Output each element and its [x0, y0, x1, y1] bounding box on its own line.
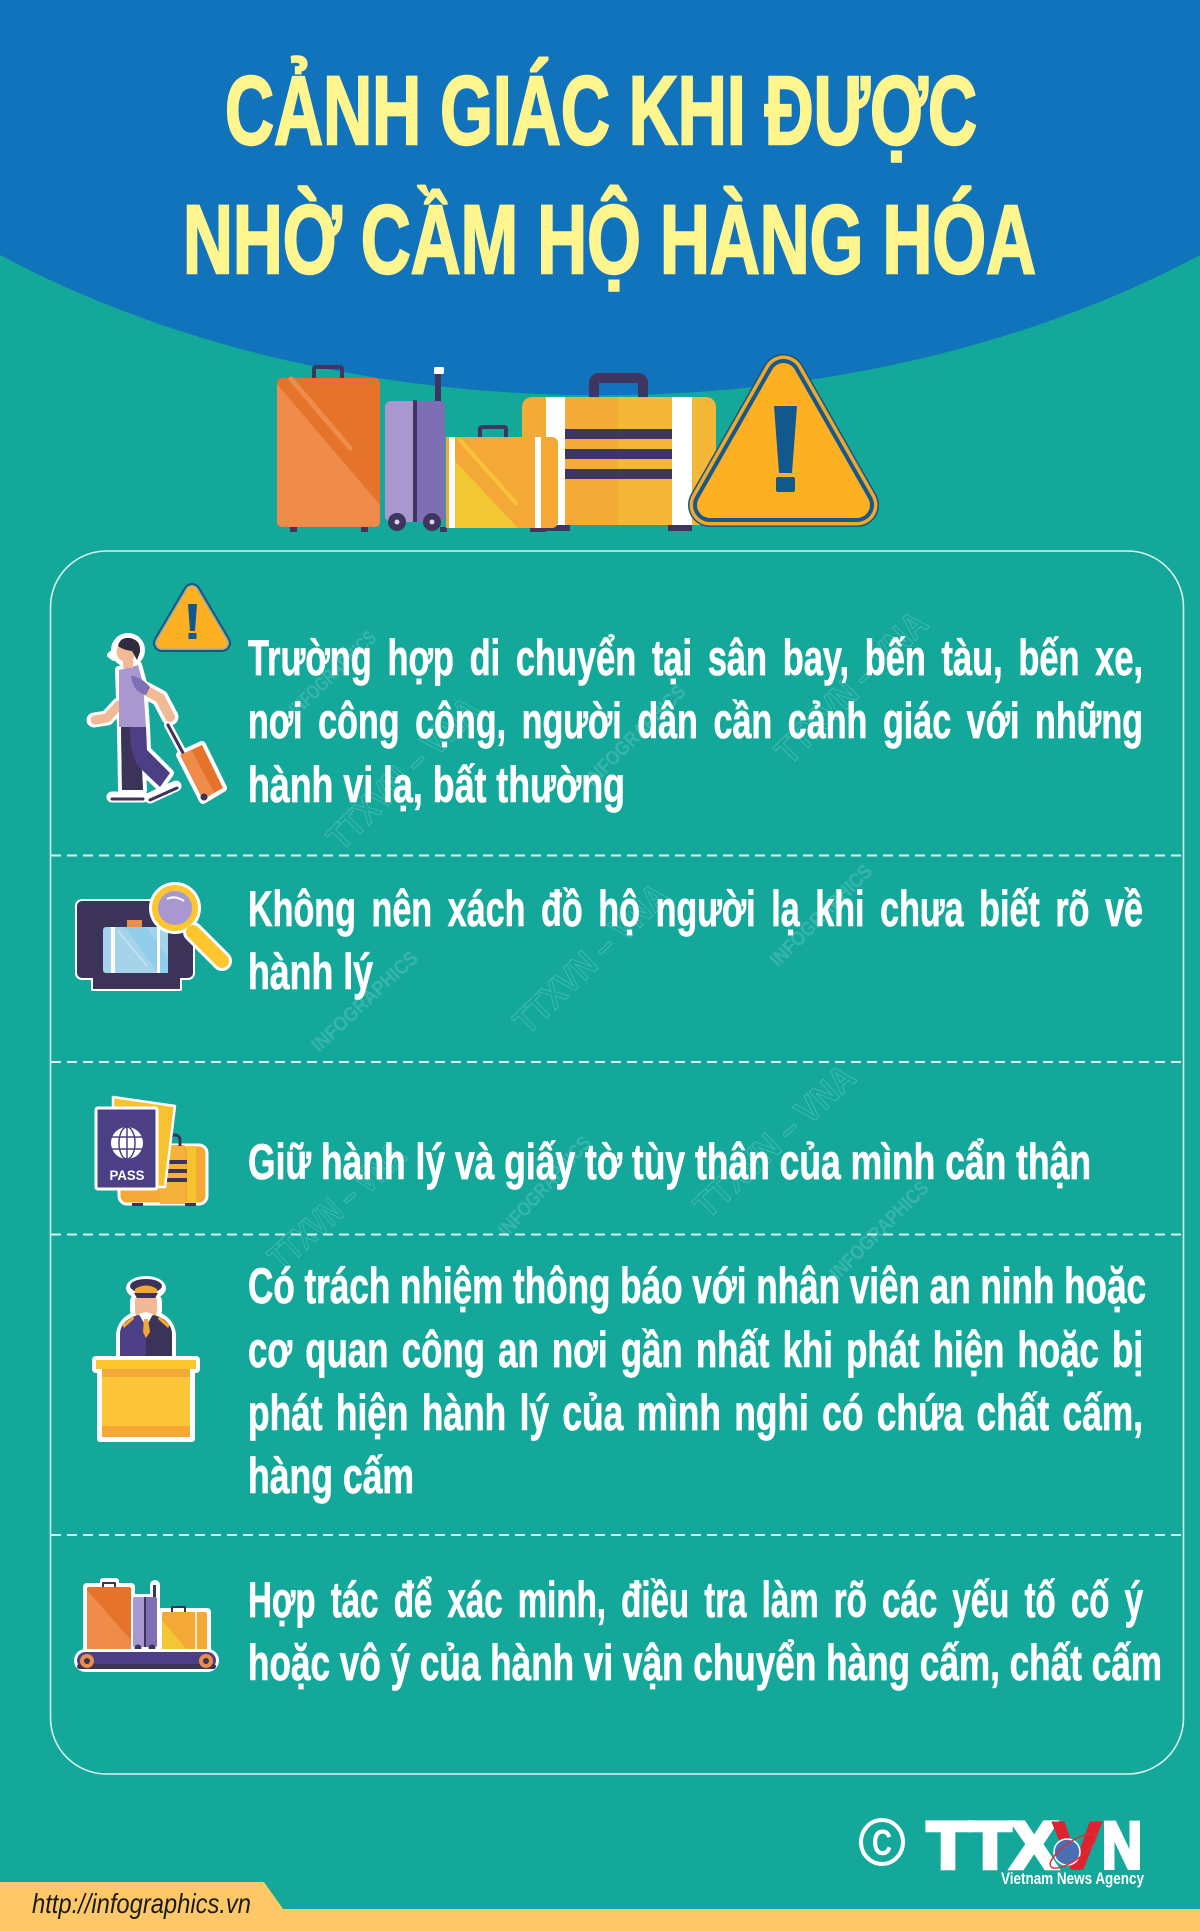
wordmark: TTX [927, 1808, 1057, 1882]
icon: traveller pulling suitcase [94, 637, 223, 800]
icon: large yellow suitcase [522, 378, 716, 531]
wordmark: V [1052, 1808, 1102, 1884]
icon: passport and documents [96, 1097, 207, 1206]
icon: orange suitcase [277, 367, 380, 532]
text [248, 881, 1143, 1000]
watermarks [260, 603, 936, 1285]
logo: TTXVN [861, 1808, 1144, 1888]
watermarks: INFOGRAPHICS [285, 627, 381, 721]
wordmark [927, 1808, 1142, 1884]
text [248, 1572, 1162, 1691]
passport label: PASS [110, 1168, 144, 1183]
text: hành lý [248, 944, 373, 1000]
watermarks: TTXVN – VNA [505, 875, 676, 1042]
watermarks: INFOGRAPHICS [766, 861, 877, 972]
watermarks: TTXVN – VNA [319, 689, 488, 858]
text: hàng cấm [248, 1448, 414, 1504]
agency name: Vietnam News Agency [1001, 1869, 1144, 1888]
text [248, 630, 1143, 813]
row 3 [96, 1097, 1091, 1206]
copyright mark: C [872, 1822, 892, 1863]
icon: purple suitcase [385, 367, 445, 531]
row 2 [77, 881, 1143, 1000]
icon: luggage scanner with magnifier [77, 882, 222, 989]
icon: luggage on conveyor belt [74, 1578, 219, 1672]
row 4 [92, 1258, 1146, 1504]
watermarks: INFOGRAPHICS [581, 681, 691, 791]
copyright mark [861, 1820, 903, 1864]
watermarks: INFOGRAPHICS [826, 1177, 933, 1285]
icon: small warning sign [162, 592, 222, 643]
globe [111, 1127, 143, 1159]
watermarks: INFOGRAPHICS [307, 947, 423, 1057]
text: hành vi lạ, bất thường [248, 757, 625, 813]
footer bar [0, 1882, 1200, 1931]
icon: warning triangle [710, 376, 857, 505]
row 1 [94, 592, 1143, 813]
illustration: luggage and warning sign [277, 367, 857, 532]
wordmark: N [1102, 1808, 1142, 1882]
title [183, 56, 1036, 294]
icon: security officer at desk [92, 1276, 200, 1442]
header blue arc [0, 0, 1200, 395]
icon: small yellow suitcase [440, 427, 558, 532]
watermarks: TTXVN – VNA [685, 1056, 863, 1226]
watermarks: TTXVN – VNA [767, 603, 936, 772]
url: http://infographics.vn [32, 1888, 251, 1919]
text [248, 1258, 1146, 1504]
row 5 [74, 1572, 1162, 1691]
watermarks: INFOGRAPHICS [494, 1132, 596, 1241]
panel: advice list [50, 551, 1184, 1774]
watermarks: TTXVN – VNA [260, 1134, 414, 1278]
